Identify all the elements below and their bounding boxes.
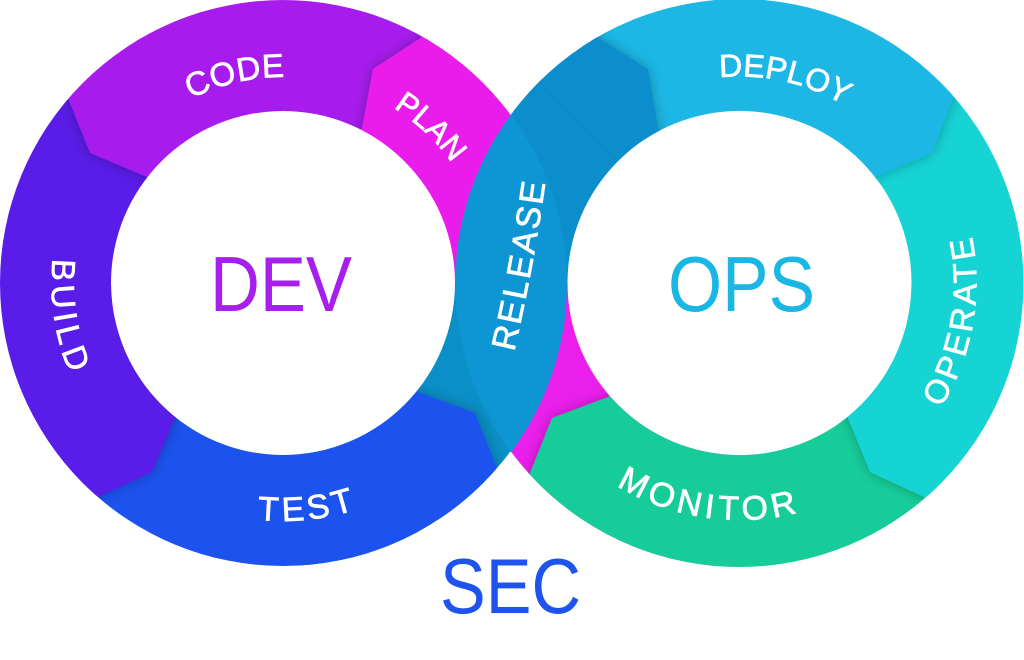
label: BUILD: BUILD <box>51 260 88 369</box>
heading: DEV: DEV <box>210 240 352 328</box>
segment: code <box>64 0 453 184</box>
label: TEST: TEST <box>258 487 350 522</box>
label: MONITOR: MONITOR <box>618 466 796 520</box>
label: PLAN: PLAN <box>395 91 468 162</box>
label: CODE: CODE <box>186 54 284 96</box>
segment: test <box>60 284 502 566</box>
left ring: DEV <box>0 0 510 566</box>
segment: operate <box>842 92 1024 502</box>
segment: release lens <box>455 114 567 452</box>
segment: deploy <box>583 0 958 182</box>
right ring: OPS <box>510 0 1024 567</box>
shadow over release lens <box>475 413 497 468</box>
segment: build <box>0 98 181 502</box>
label: RELEASE: RELEASE <box>492 182 546 350</box>
heading: OPS: OPS <box>668 240 815 328</box>
label: DEPLOY: DEPLOY <box>720 54 855 102</box>
heading: SEC: SEC <box>440 542 581 630</box>
label: OPERATE: OPERATE <box>924 238 977 404</box>
segment: plan <box>355 33 510 287</box>
segment: monitor <box>525 284 1000 567</box>
segment: release upper band <box>510 34 666 290</box>
